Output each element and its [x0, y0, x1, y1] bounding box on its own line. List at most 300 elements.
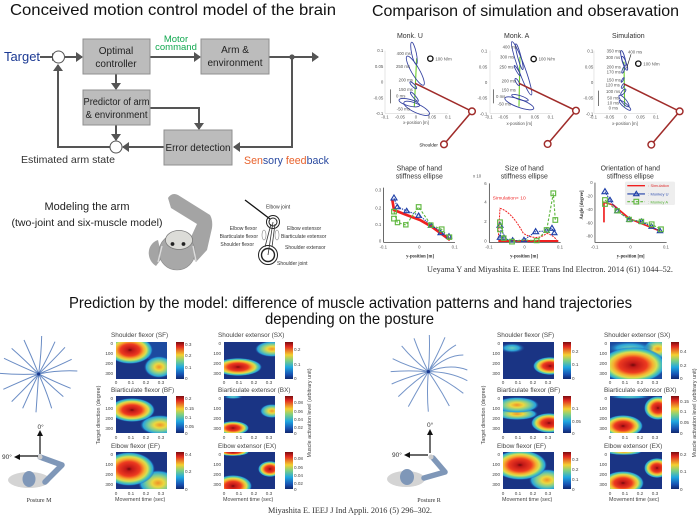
heatmap: biarticulate flexor R: 0.3: [545, 435, 552, 440]
diagram: two-joint six-muscle model: Elbow extensor: [287, 226, 322, 232]
chart: size: 6: [484, 181, 487, 186]
heatmap: elbow extensor: 0.3: [266, 491, 273, 496]
chart: size: x 10: [473, 174, 482, 179]
heatmap: biarticulate flexor R: Biarticulate flexor (BF): [497, 387, 560, 394]
posture M diagram: 0°: [38, 423, 44, 431]
heatmap: elbow flexor: 0.2: [185, 469, 192, 474]
heatmap: biarticulate extensor: 0.3: [266, 435, 273, 440]
heatmap: shoulder flexor: 0.3: [185, 342, 192, 347]
heatmap: elbow flexor R: 0: [572, 487, 575, 492]
heatmap: shoulder extensor R: 0.2: [637, 380, 644, 385]
plot: Simulation: 200 ms: [607, 65, 621, 70]
heatmap: elbow flexor R: [492, 443, 579, 496]
plot: Monk. U: 0.1: [377, 48, 384, 53]
heatmap: elbow flexor R: 0.2: [572, 467, 579, 472]
heatmap: elbow flexor: 0.2: [143, 491, 150, 496]
heatmap: biarticulate extensor: Biarticulate extensor (BX): [218, 387, 290, 394]
plot: Monk. U: -0.1: [376, 111, 384, 116]
heatmap: biarticulate flexor: 100: [105, 406, 113, 411]
heatmap: biarticulate flexor: 0: [115, 435, 118, 440]
heatmap: elbow flexor R: 0.3: [545, 491, 552, 496]
plot: Simulation: 400 ms: [628, 50, 642, 55]
heatmap: elbow extensor R: 0.2: [680, 452, 687, 457]
chart: orientation: 0: [629, 244, 632, 249]
heatmap: shoulder extensor R: 0.2: [680, 363, 687, 368]
heatmap: shoulder extensor R: 0.1: [622, 380, 629, 385]
chart: size: 0: [523, 244, 526, 249]
plot: Monk. U: Shoulder: [419, 142, 438, 147]
diagram: two-joint six-muscle model: [220, 200, 327, 267]
heatmap: shoulder flexor: [105, 332, 192, 385]
heatmap: shoulder flexor R: 0.2: [530, 380, 537, 385]
heatmap: biarticulate extensor: 0.02: [294, 425, 303, 430]
chart: shape: [375, 166, 458, 260]
heading: modeling the arm: Modeling the arm: [44, 201, 130, 213]
heatmap: shoulder extensor R: Shoulder extensor (SX): [604, 332, 670, 339]
title: comparison of simulation and observation: Comparison of simulation and obseravation: [372, 3, 679, 20]
heatmap: biarticulate flexor: 0.15: [185, 406, 194, 411]
heatmap: shoulder extensor: Shoulder extensor (SX): [218, 332, 284, 339]
plot: Simulation: -0.1: [586, 111, 594, 116]
heatmap: elbow flexor: [103, 443, 192, 496]
posture M diagram: [2, 423, 62, 504]
heatmap: biarticulate extensor R: 100: [599, 406, 607, 411]
flow diagram: motion control model: [4, 34, 329, 167]
heatmap: elbow extensor R: 0.1: [622, 491, 629, 496]
diagram: two-joint six-muscle model: Biarticulate flexor: [220, 234, 258, 240]
heatmap: elbow extensor R: 0.3: [652, 491, 659, 496]
block: arm and environment: Arm &: [221, 45, 249, 56]
plot: Simulation: 300 ms: [606, 55, 620, 60]
heatmap: biarticulate extensor: 100: [213, 406, 221, 411]
heatmap: biarticulate extensor R: Biarticulate extensor (BX): [604, 387, 676, 394]
chart: orientation: -80: [586, 233, 593, 238]
hand trajectories: posture M: [0, 336, 77, 412]
heatmap: shoulder flexor R: 0: [502, 380, 505, 385]
posture R diagram: 0°: [427, 421, 434, 429]
heatmap: shoulder flexor: 0.2: [143, 380, 150, 385]
panel: stiffness ellipses: [373, 33, 683, 148]
plot: Monk. A: 0.1: [548, 115, 554, 120]
heatmap: elbow extensor R: 0: [680, 487, 683, 492]
heatmap: shoulder extensor: 0: [294, 376, 297, 381]
heatmap: elbow flexor: Elbow flexor (EF): [111, 443, 160, 450]
plot: Monk. U: 100 N/m: [435, 56, 452, 61]
heatmap: elbow flexor: 0: [185, 487, 188, 492]
heatmaps: posture M: Target direction (degree): [96, 385, 102, 444]
heatmap: elbow extensor: 300: [213, 482, 221, 487]
heatmap: biarticulate extensor: 0.08: [294, 400, 303, 405]
heatmap: biarticulate flexor: 0.05: [185, 424, 194, 429]
block: predictor: [83, 90, 150, 125]
plot: Monk. A: 0.05: [479, 64, 488, 69]
heatmap: biarticulate extensor: 0.04: [294, 417, 303, 422]
chart: size: 0.1: [557, 244, 564, 249]
heatmap: shoulder flexor: 0.2: [185, 353, 192, 358]
heatmap: biarticulate flexor R: 300: [492, 426, 500, 431]
heatmap: elbow extensor: 200: [213, 472, 221, 477]
heatmap: shoulder extensor: 200: [213, 361, 221, 366]
heatmaps: posture M: [96, 332, 313, 503]
heatmap: shoulder extensor: 0.2: [251, 380, 258, 385]
chart: shape: stiffness ellipse: [396, 174, 443, 181]
heatmaps: posture R: Target direction (degree): [481, 385, 487, 444]
diagram: two-joint six-muscle model: Shoulder joint: [277, 261, 308, 267]
title: conceived motion control model: Conceived motion control model of the brain: [10, 2, 336, 19]
chart: orientation: : Monkey U: [648, 191, 669, 196]
plot: Monk. A: 0.05: [531, 115, 540, 120]
heatmap: elbow flexor R: 0.1: [572, 477, 579, 482]
plot: Simulation: 10 ms: [607, 100, 619, 105]
chart: orientation: 0.1: [663, 244, 670, 249]
heatmap: elbow flexor: 100: [105, 462, 113, 467]
diagram: two-joint six-muscle model: Elbow joint: [266, 204, 291, 210]
heatmap: elbow flexor: 0: [115, 491, 118, 496]
chart: orientation: -60: [586, 220, 593, 225]
heatmap: biarticulate flexor: 300: [105, 426, 113, 431]
heatmap: elbow flexor: 0.3: [158, 491, 165, 496]
heatmap: elbow extensor: 0.02: [294, 481, 303, 486]
heatmap: biarticulate extensor R: 0.2: [637, 435, 644, 440]
heatmap: biarticulate extensor: 0: [294, 431, 297, 436]
chart: orientation: stiffness ellipse: [607, 174, 654, 181]
chart: size: -0.1: [485, 244, 493, 249]
heatmap: elbow flexor: 0: [110, 452, 113, 457]
chart: size: Size of hand: [505, 166, 544, 173]
block: predictor: Predictor of arm: [84, 97, 150, 108]
chart: shape: 0: [418, 244, 421, 249]
heatmap: biarticulate extensor: [213, 387, 303, 440]
plot: Simulation: 0.1: [653, 115, 660, 120]
heatmap: shoulder flexor: 200: [105, 361, 113, 366]
plot: Monk. U: 0.05: [428, 115, 437, 120]
plot: Monk. U: 250 ms: [396, 64, 410, 69]
heatmap: shoulder extensor R: [599, 332, 687, 385]
heatmap: biarticulate flexor R: 0: [572, 431, 575, 436]
heatmap: shoulder flexor R: 0.3: [545, 380, 552, 385]
chart: size: Simulation× 10: [493, 195, 526, 201]
plot: Simulation: 0.1: [587, 48, 594, 53]
plot: Monk. A: -0.1: [485, 115, 493, 120]
heatmap: shoulder extensor R: 300: [599, 371, 607, 376]
plot: Simulation: -0.05: [604, 115, 615, 120]
heatmap: shoulder extensor R: 0: [680, 376, 683, 381]
heatmap: shoulder flexor R: 0.2: [572, 349, 579, 354]
chart: shape: 0.3: [375, 188, 382, 193]
heatmap: elbow flexor R: Elbow flexor (EF): [497, 443, 546, 450]
chart: orientation: 0: [590, 180, 593, 185]
heatmap: biarticulate flexor: 0.2: [185, 396, 192, 401]
heatmap: biarticulate flexor R: 200: [492, 416, 500, 421]
plot: Simulation: 0: [624, 115, 627, 120]
heatmap: elbow extensor: 0.04: [294, 473, 303, 478]
heatmap: biarticulate flexor: 0.1: [185, 415, 192, 420]
heatmap: elbow flexor: 200: [105, 472, 113, 477]
chart: shape: Shape of hand: [397, 166, 442, 173]
plot: Monk. U: 400 ms: [397, 51, 411, 56]
heatmap: biarticulate flexor: 0.1: [128, 435, 135, 440]
plot: Monk. A: -0.05: [498, 115, 509, 120]
plot: Simulation: 350 ms: [607, 48, 621, 53]
plot: Simulation: 170 ms: [607, 70, 621, 75]
chart: orientation: Angle [degree]: [580, 190, 585, 220]
plot: Simulation: -0.1: [590, 115, 598, 120]
heatmap: shoulder extensor: 300: [213, 371, 221, 376]
heatmap: shoulder flexor R: 0: [497, 341, 500, 346]
chart: shape: -0.1: [380, 244, 388, 249]
chart: size: y-position [m]: [510, 255, 538, 260]
diagram: two-joint six-muscle model: Biarticulate extensor: [281, 234, 327, 240]
posture M diagram: Posture M: [27, 498, 52, 504]
heatmap: biarticulate extensor: 0: [223, 435, 226, 440]
heatmap: shoulder flexor R: 300: [492, 371, 500, 376]
plot: Monk. A: -50 ms: [498, 101, 511, 106]
heatmap: shoulder flexor: 0.3: [158, 380, 165, 385]
heatmap: biarticulate flexor R: 0.1: [572, 406, 579, 411]
summing junction: target: [52, 51, 64, 63]
heatmap: elbow extensor: 0: [223, 491, 226, 496]
heatmap: shoulder flexor: 0: [110, 341, 113, 346]
block: error detection: [164, 130, 232, 165]
heatmap: elbow extensor R: [599, 443, 687, 496]
heatmap: biarticulate flexor R: 0.2: [530, 435, 537, 440]
heatmap: elbow extensor: 0.08: [294, 456, 303, 461]
heatmap: shoulder extensor: 0: [218, 341, 221, 346]
plot: Monk. U: -0.05: [395, 115, 406, 120]
heatmap: biarticulate flexor R: 0: [502, 435, 505, 440]
heatmap: biarticulate flexor R: [492, 387, 581, 440]
diagram: two-joint six-muscle model: Shoulder flexor: [220, 242, 254, 248]
heatmap: shoulder flexor: 100: [105, 351, 113, 356]
heatmap: shoulder extensor: 0: [223, 380, 226, 385]
heatmap: elbow extensor: 100: [213, 462, 221, 467]
plot: Monk. A: 0: [485, 80, 488, 85]
heatmap: shoulder flexor R: 0: [572, 376, 575, 381]
heatmap: biarticulate flexor: 0: [110, 396, 113, 401]
plot: Simulation: 0.05: [636, 115, 645, 120]
plot: Monk. A: 100 N/m: [539, 57, 555, 62]
plot: Simulation: 120 ms: [606, 83, 620, 88]
heatmap: elbow extensor: 0.2: [251, 491, 258, 496]
block: optimal controller: Optimal: [99, 46, 133, 57]
heatmap: shoulder flexor: 0: [115, 380, 118, 385]
chart: size: [473, 166, 564, 260]
plot: Monk. U: -0.1: [381, 115, 389, 120]
heatmap: biarticulate extensor R: 0.1: [622, 435, 629, 440]
heatmap: elbow extensor R: 0: [609, 491, 612, 496]
plot: Simulation: 100 N/m: [643, 61, 660, 66]
plot: Simulation: 50 ms: [607, 96, 619, 101]
plot: Monk. A: 250 ms: [499, 64, 514, 69]
chart: orientation: [580, 166, 675, 260]
heatmap: shoulder extensor R: 0: [609, 380, 612, 385]
heatmap: elbow extensor R: 0.1: [680, 469, 687, 474]
heading: prediction by the model: Prediction by the model: difference of muscle activation patterns and hand trajectories: [69, 295, 632, 312]
heatmap: biarticulate flexor: 200: [105, 416, 113, 421]
block: predictor: & environment: [86, 110, 148, 121]
heatmap: elbow flexor: 0.1: [128, 491, 135, 496]
heatmap: biarticulate flexor: 0.3: [158, 435, 165, 440]
plot: Monk. A: Monk. A: [504, 33, 530, 40]
block: error detection: Error detection: [166, 143, 230, 154]
plot: Monk. U: 0.1: [445, 115, 452, 120]
heatmap: shoulder extensor: 0.1: [236, 380, 243, 385]
heatmap: biarticulate flexor R: 0: [497, 396, 500, 401]
heatmap: elbow flexor R: 100: [492, 462, 500, 467]
heatmaps: posture R: [481, 332, 698, 503]
plot: Monk. A: -0.05: [477, 96, 488, 101]
label: sensory feedback: Sensory feedback: [244, 155, 329, 167]
heatmap: shoulder flexor R: Shoulder flexor (SF): [497, 332, 554, 339]
chart: orientation: : Simulation: [648, 183, 669, 188]
chart: size: 2: [484, 219, 487, 224]
heatmap: biarticulate flexor R: 0.1: [515, 435, 522, 440]
heatmap: biarticulate extensor R: 0.1: [680, 409, 687, 414]
heatmap: shoulder flexor: 0: [185, 376, 188, 381]
posture R diagram: 90°: [392, 451, 402, 459]
posture R diagram: [387, 421, 445, 504]
block: arm and environment: [201, 39, 269, 74]
plot: Monk. U: 200 ms: [399, 77, 413, 82]
heatmap: elbow extensor R: 100: [599, 462, 607, 467]
posture M diagram: 90°: [2, 453, 12, 461]
heatmap: biarticulate flexor: Biarticulate flexor (BF): [111, 387, 174, 394]
chart: orientation: -20: [586, 194, 593, 199]
heatmap: biarticulate flexor R: 0.05: [572, 419, 581, 424]
plot: Monk. U: x-position [m]: [403, 120, 429, 125]
heatmap: shoulder flexor R: 0.1: [515, 380, 522, 385]
block: arm and environment: environment: [207, 58, 263, 69]
plot: Monk. A: 400 ms: [503, 44, 517, 49]
chart: size: 0: [484, 239, 487, 244]
heatmap: elbow flexor R: 200: [492, 472, 500, 477]
heatmap: elbow extensor: 0: [294, 487, 297, 492]
heatmap: biarticulate extensor R: 300: [599, 426, 607, 431]
plot: Monk. A: 0 ms: [496, 94, 505, 99]
plot: Simulation: x-position [m]: [612, 121, 638, 126]
heatmaps: posture M: Movement time (sec): [223, 497, 274, 503]
heatmap: shoulder flexor: Shoulder flexor (SF): [111, 332, 168, 339]
heatmap: shoulder flexor R: 100: [492, 351, 500, 356]
heatmap: biarticulate extensor: 0.1: [236, 435, 243, 440]
plot: Monk. U: -0.05: [373, 95, 384, 100]
plot: Monk. A: [477, 33, 579, 147]
illustration: monkey with raised arm: [149, 194, 212, 270]
chart: orientation: Orientation of hand: [601, 166, 660, 173]
heatmap: biarticulate extensor R: 200: [599, 416, 607, 421]
heatmap: biarticulate extensor R: 0.3: [652, 435, 659, 440]
plot: Monk. U: 0: [415, 115, 418, 120]
heatmap: shoulder extensor: [213, 332, 301, 385]
heatmap: elbow extensor R: 300: [599, 482, 607, 487]
plot: Simulation: 0.05: [585, 64, 594, 69]
heatmap: shoulder extensor R: 0.4: [680, 349, 687, 354]
block: optimal controller: controller: [95, 59, 137, 70]
heatmap: elbow flexor: 300: [105, 482, 113, 487]
heatmap: biarticulate extensor: 0: [218, 396, 221, 401]
heatmap: shoulder extensor: 0.1: [294, 362, 301, 367]
heatmap: shoulder flexor: 0.1: [128, 380, 135, 385]
label: target: Target: [4, 50, 41, 64]
heatmap: biarticulate extensor R: 0: [604, 396, 607, 401]
heatmap: biarticulate extensor R: 0: [680, 431, 683, 436]
chart: shape: 0.2: [375, 205, 382, 210]
summing junction: estimate: [110, 141, 122, 153]
plot: Monk. U: 0 ms: [396, 93, 405, 98]
plot: Simulation: -0.05: [583, 96, 594, 101]
heatmap: elbow flexor R: 300: [492, 482, 500, 487]
plot: Simulation: Simulation: [612, 33, 645, 40]
label: estimated arm state: Estimated arm state: [21, 154, 115, 166]
chart: orientation: -40: [586, 207, 593, 212]
plot: Monk. A: 0: [519, 115, 522, 120]
heatmap: biarticulate extensor R: [599, 387, 689, 440]
heatmap: elbow flexor R: 0: [502, 491, 505, 496]
heatmap: shoulder flexor: 300: [105, 371, 113, 376]
heatmaps: posture M: Muscle activation level (arbitrary unit): [307, 368, 313, 457]
chart: shape: 0: [379, 239, 382, 244]
heatmap: shoulder extensor R: 100: [599, 351, 607, 356]
label: motor command: command: [155, 42, 197, 53]
chart: size: stiffness ellipse: [501, 174, 548, 181]
heatmap: shoulder flexor R: 0.1: [572, 362, 579, 367]
heatmap: elbow extensor R: 0: [604, 452, 607, 457]
heatmap: shoulder flexor R: [492, 332, 579, 385]
chart: shape: 0.1: [452, 244, 458, 249]
heatmap: shoulder flexor R: 200: [492, 361, 500, 366]
label: motor command: Motor: [164, 34, 188, 45]
heatmap: biarticulate flexor R: 100: [492, 406, 500, 411]
plot: Simulation: 150 ms: [607, 77, 621, 82]
citation: Miyashita: Miyashita E. IEEJ J Ind Appli. 2016 (5) 296–302.: [268, 506, 432, 515]
heatmap: elbow extensor R: Elbow extensor (EX): [604, 443, 662, 450]
plot: Simulation: [583, 33, 683, 148]
heatmap: elbow extensor: 0.06: [294, 465, 303, 470]
citation: Ueyama and Miyashita: Ueyama Y and Miyashita E. IEEE Trans Ind Electron. 2014 (61) 1044–52.: [427, 264, 673, 274]
heatmap: biarticulate flexor: 0.2: [143, 435, 150, 440]
heatmap: shoulder extensor R: 0: [604, 341, 607, 346]
heatmap: elbow extensor: [213, 443, 303, 497]
plot: Monk. U: 150 ms: [399, 87, 413, 92]
heatmap: elbow extensor R: 200: [599, 472, 607, 477]
heatmaps: posture R: Movement time (sec): [609, 497, 660, 503]
hand trajectories: posture R: [391, 335, 467, 412]
heatmap: elbow flexor R: 0.3: [572, 457, 579, 462]
block: optimal controller: [83, 39, 150, 74]
plot: Simulation: 0 ms: [609, 105, 618, 110]
heatmaps: posture R: Muscle activation level (arbitrary unit): [692, 368, 698, 457]
heatmap: elbow extensor: 0.1: [236, 491, 243, 496]
panel: stiffness ellipse charts: [375, 166, 675, 260]
heatmaps: posture R: Movement time (sec): [502, 497, 553, 503]
plot: Monk. U: -50 ms: [397, 107, 410, 112]
chart: orientation: -0.1: [591, 244, 599, 249]
plot: Monk. A: 150 ms: [502, 88, 516, 93]
heatmap: biarticulate flexor: [105, 387, 194, 440]
heading: modeling the arm: (two-joint and six-muscle model): [12, 217, 162, 229]
heatmap: biarticulate extensor R: 0.15: [680, 399, 689, 404]
heatmap: elbow flexor R: 0: [497, 452, 500, 457]
heatmap: biarticulate extensor R: 0: [609, 435, 612, 440]
heatmap: biarticulate flexor: 0: [185, 431, 188, 436]
chart: orientation: y-position [m]: [617, 255, 645, 260]
heatmap: shoulder extensor: 0.3: [266, 380, 273, 385]
heatmap: shoulder extensor R: 0.3: [652, 380, 659, 385]
plot: Monk. U: [373, 33, 475, 148]
plot: Monk. A: -0.1: [480, 111, 488, 116]
heatmap: elbow extensor R: 0.2: [637, 491, 644, 496]
posture R diagram: Posture R: [417, 498, 441, 504]
